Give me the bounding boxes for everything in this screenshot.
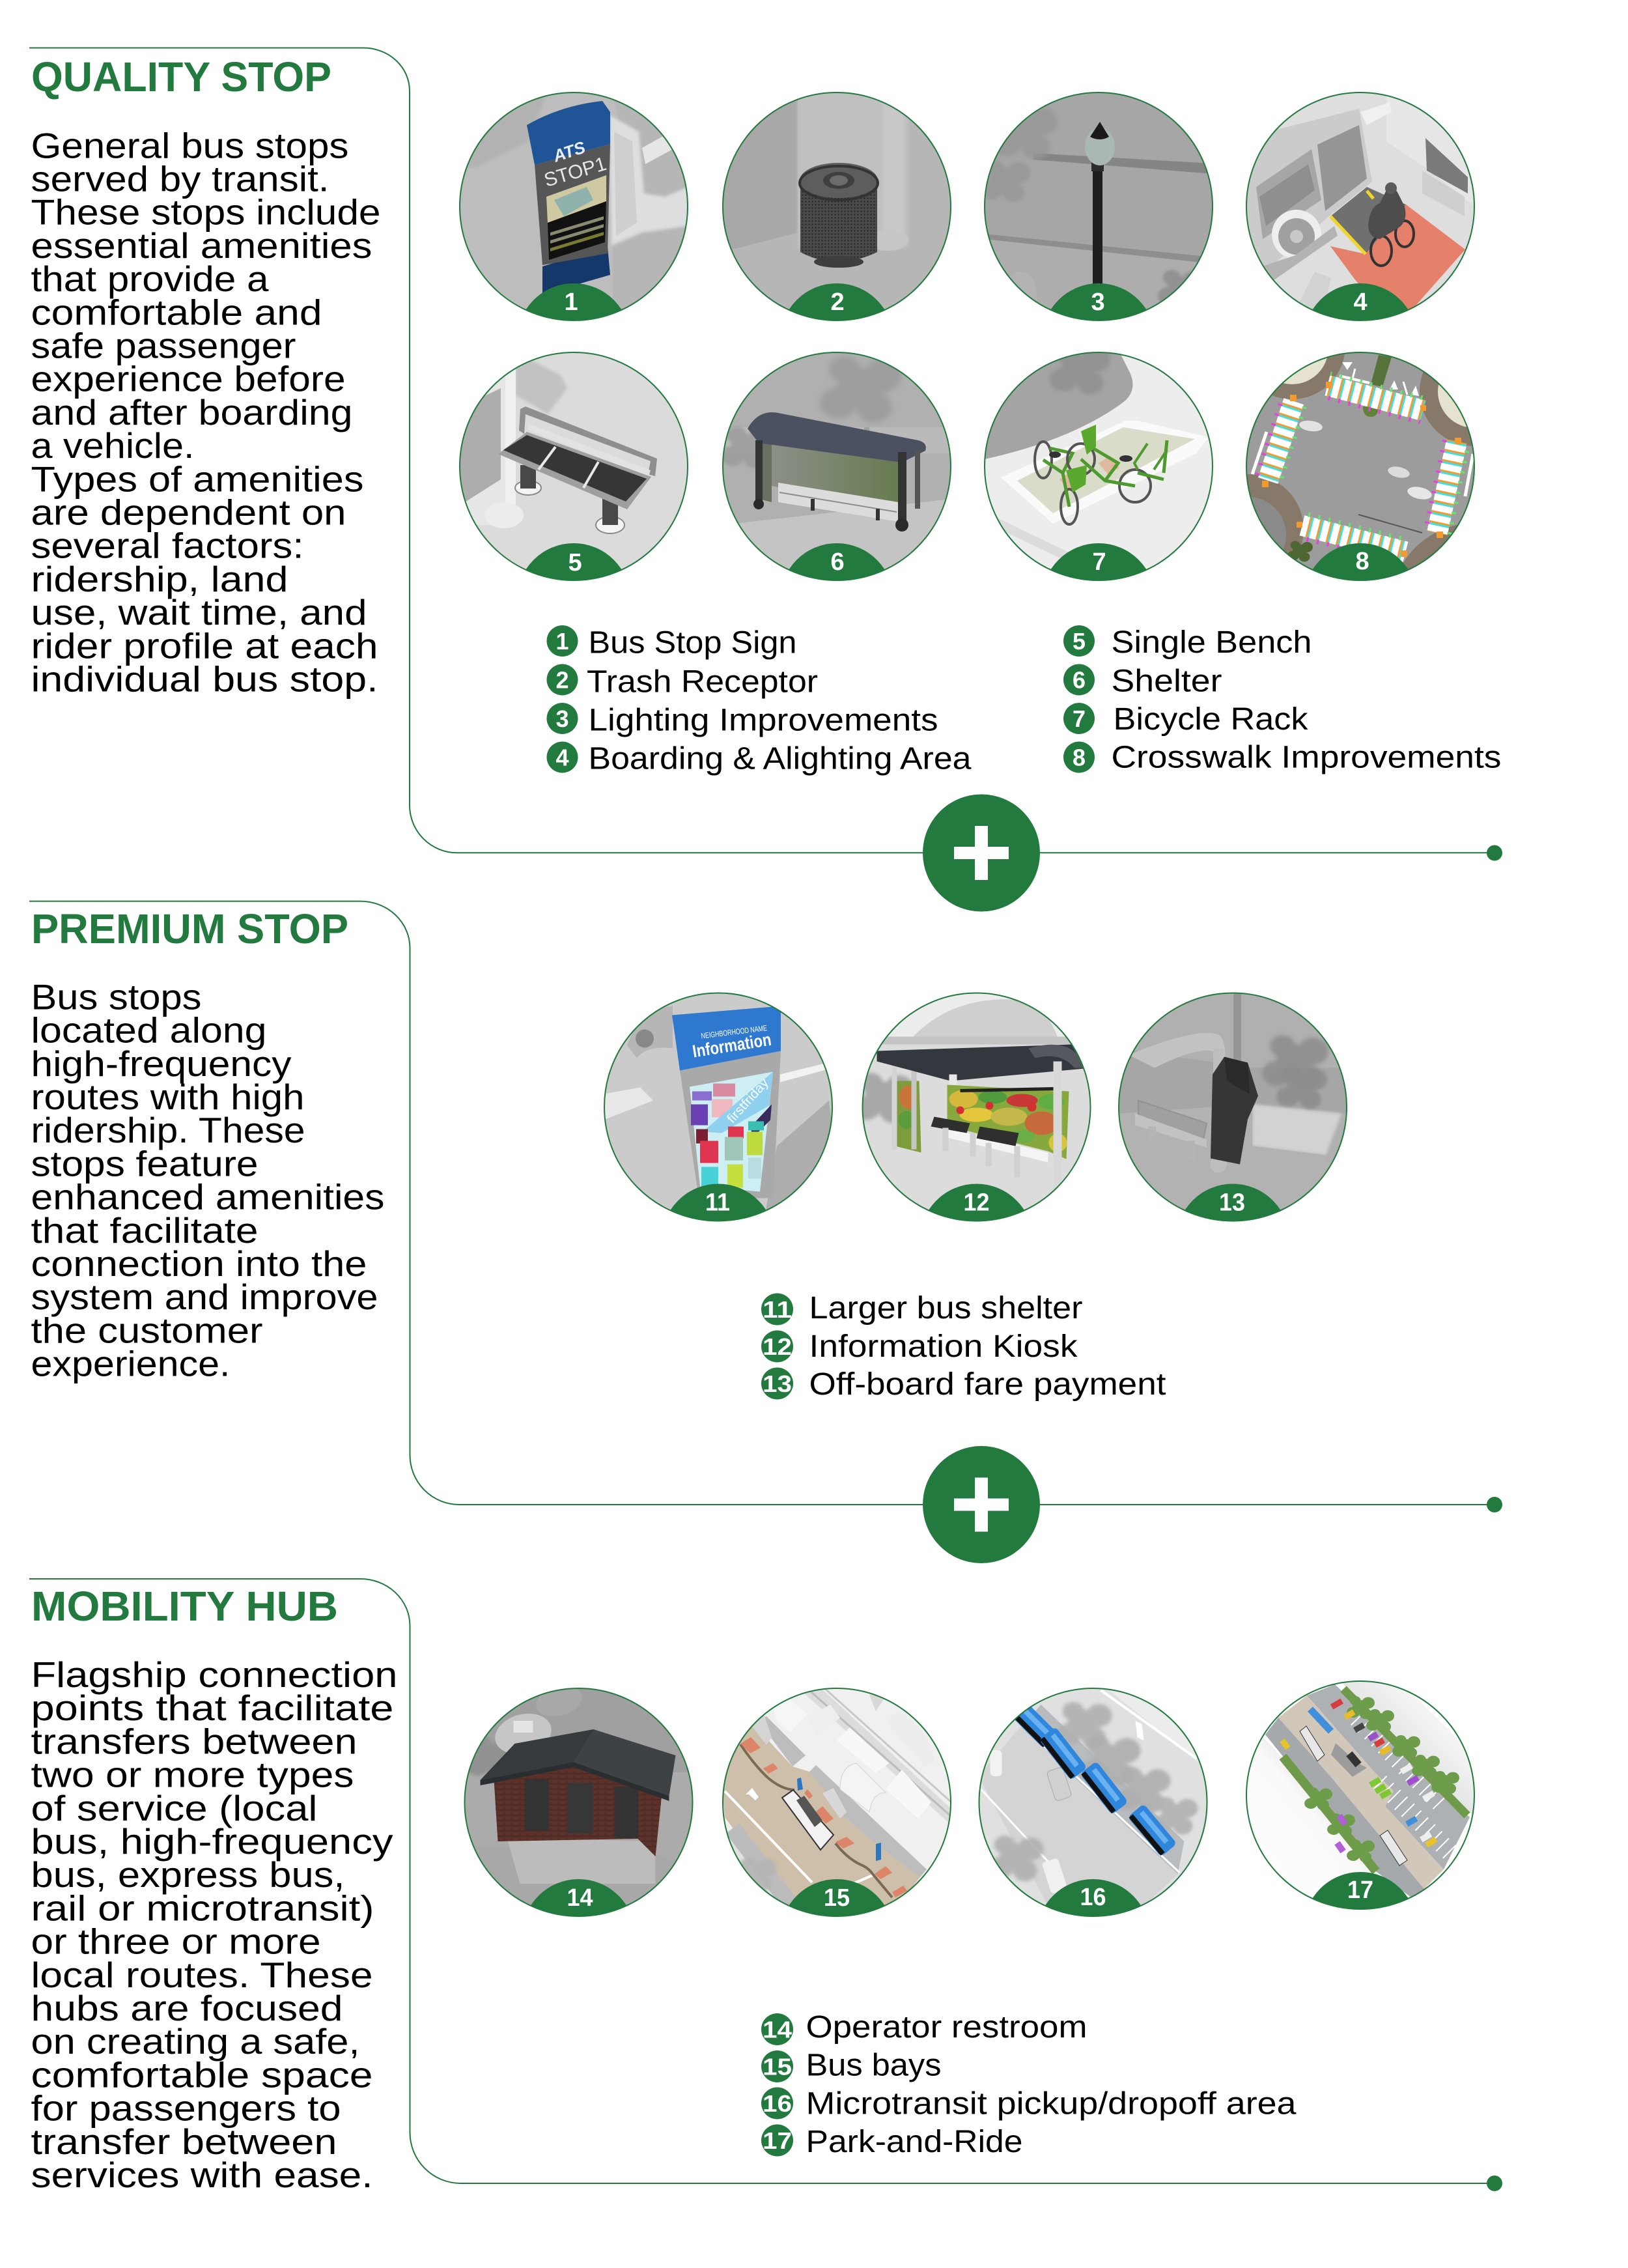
icon: 15 bus bays: 15 (824, 1884, 850, 1912)
text block: mobility hub description: transfer between (31, 2121, 337, 2162)
text block: mobility hub description: services with ease. (31, 2155, 372, 2195)
text block: quality stop description: Types of amenities (31, 459, 363, 499)
line end dot (1487, 1497, 1502, 1512)
panel: premium stop (29, 901, 1502, 1563)
icon: 11 information kiosk: NEIGHBORHOOD NAME (701, 1023, 768, 1040)
text block: quality stop description: served by transit. (31, 159, 330, 199)
legend: mobility hub amenities: 14 (763, 2017, 792, 2043)
legend: quality stop amenities: Boarding & Alighting Area (589, 742, 972, 776)
text block: premium stop description: routes with high (31, 1077, 305, 1117)
legend: quality stop amenities: Bicycle Rack (1114, 702, 1309, 737)
text block: premium stop description: that facilitate (31, 1210, 258, 1251)
text block: quality stop description: are dependent on (31, 492, 346, 533)
legend: premium stop amenities: 13 (763, 1370, 792, 1397)
legend: quality stop amenities: Single Bench (1111, 625, 1312, 660)
heading: quality stop: QUALITY STOP (31, 53, 331, 100)
legend: mobility hub amenities: Park-and-Ride (806, 2125, 1022, 2159)
text block: quality stop description: that provide a (31, 259, 269, 299)
legend: quality stop amenities: 1 (555, 628, 569, 655)
text block: quality stop description: rider profile at each (31, 625, 378, 666)
legend: quality stop amenities: 8 (1073, 744, 1086, 771)
icon: 15 bus bays (722, 1688, 951, 1917)
legend: mobility hub amenities: 16 (763, 2090, 792, 2117)
text block: mobility hub description: or three or more (31, 1921, 320, 1962)
text block: mobility hub description: for passengers to (31, 2088, 341, 2129)
icon: 1 bus stop sign (459, 92, 688, 321)
legend: mobility hub amenities: Microtransit pickup/dropoff area (806, 2087, 1297, 2121)
legend: mobility hub amenities: Operator restroom (806, 2010, 1088, 2045)
icon: 13 off-board fare payment: 13 (1219, 1189, 1245, 1217)
legend: premium stop amenities: Information Kiosk (809, 1329, 1078, 1364)
legend: quality stop amenities: Lighting Improvements (589, 703, 938, 738)
icon: plus connector (923, 1446, 1040, 1563)
icon: 7 bicycle rack (984, 352, 1213, 581)
text block: mobility hub description: bus, express bus, (31, 1854, 345, 1895)
icon: 11 information kiosk: 11 (705, 1189, 730, 1217)
text block: quality stop description: individual bus stop. (31, 659, 378, 700)
icon: 11 information kiosk: Information (691, 1030, 772, 1061)
text block: quality stop description: safe passenger (31, 326, 296, 366)
legend: quality stop amenities: Shelter (1111, 664, 1222, 698)
panel: quality stop (29, 48, 1558, 912)
text block: mobility hub description: comfortable space (31, 2054, 372, 2095)
text block: mobility hub description (31, 1654, 397, 2195)
icon: plus connector (923, 795, 1040, 912)
legend: quality stop amenities: Crosswalk Improvements (1111, 741, 1502, 775)
text block: mobility hub description: local routes. These (31, 1955, 372, 1995)
line end dot (1487, 2176, 1502, 2191)
icon: 16 microtransit pickup dropoff area (978, 1688, 1207, 1917)
legend: premium stop amenities: Off-board fare payment (809, 1367, 1166, 1402)
text block: premium stop description: connection into the (31, 1243, 367, 1284)
legend: premium stop amenities: 12 (763, 1333, 792, 1360)
legend: quality stop amenities: 5 (1073, 628, 1086, 655)
text block: premium stop description: stops feature (31, 1143, 258, 1184)
icon: 14 operator restroom (464, 1688, 693, 1917)
text block: premium stop description: located along (31, 1010, 267, 1051)
line end dot (1487, 845, 1502, 861)
text block: quality stop description: comfortable and (31, 292, 322, 332)
icon: 1 bus stop sign: STOP1 (542, 153, 609, 191)
icon: 8 crosswalk improvements (1246, 352, 1475, 581)
icon: 12 larger bus shelter: 12 (964, 1189, 990, 1217)
icon: 7 bicycle rack: 7 (1092, 548, 1106, 576)
text block: mobility hub description: rail or microtransit) (31, 1888, 374, 1928)
heading: premium stop: PREMIUM STOP (31, 905, 348, 952)
text block: quality stop description: use, wait time, and (31, 592, 367, 632)
icon: 3 lighting improvements: 3 (1091, 289, 1105, 316)
icon: 17 park-and-ride: 17 (1347, 1877, 1373, 1904)
legend: premium stop amenities: 11 (763, 1296, 792, 1323)
legend: premium stop amenities (761, 1291, 1166, 1402)
text block: premium stop description: enhanced amenities (31, 1177, 384, 1217)
panel outline: mobility hub bracket (29, 1579, 1495, 2183)
legend: premium stop amenities: Larger bus shelter (809, 1291, 1083, 1325)
legend: mobility hub amenities: 15 (763, 2053, 792, 2080)
text block: quality stop description: a vehicle. (31, 425, 194, 466)
icon: 4 boarding and alighting area: 4 (1353, 289, 1368, 316)
text block: mobility hub description: two or more types (31, 1755, 354, 1795)
legend: quality stop amenities: Trash Receptor (587, 664, 818, 699)
icon: 2 trash receptor: 2 (830, 289, 845, 316)
text block: quality stop description: These stops include (31, 192, 380, 233)
heading: mobility hub: MOBILITY HUB (31, 1583, 338, 1630)
icon: 4 boarding and alighting area (1246, 92, 1475, 321)
text block: quality stop description: General bus stops (31, 125, 349, 165)
icon: 1 bus stop sign: 1 (564, 289, 578, 316)
text block: premium stop description: experience. (31, 1344, 231, 1384)
legend: quality stop amenities: Bus Stop Sign (589, 626, 797, 660)
legend: quality stop amenities: 7 (1073, 705, 1086, 732)
text block: quality stop description: several factors: (31, 526, 303, 566)
text block: mobility hub description: of service (local (31, 1788, 318, 1828)
text block: premium stop description (31, 976, 384, 1384)
text block: quality stop description: essential amenities (31, 225, 372, 266)
icon: 16 microtransit pickup dropoff area: 16 (1080, 1884, 1106, 1911)
text block: mobility hub description: on creating a safe, (31, 2021, 359, 2062)
icon: 2 trash receptor (722, 92, 951, 321)
text block: premium stop description: the customer (31, 1310, 263, 1350)
panel outline: quality stop bracket (29, 48, 1495, 853)
panel: mobility hub (29, 1579, 1502, 2195)
icon: 6 shelter (722, 352, 951, 581)
text block: mobility hub description: hubs are focused (31, 1988, 343, 2028)
text block: premium stop description: system and improve (31, 1277, 378, 1317)
text block: premium stop description: ridership. These (31, 1110, 305, 1150)
icon: 5 single bench: 5 (568, 549, 582, 576)
icon: 5 single bench (459, 352, 688, 581)
text block: quality stop description: experience before (31, 359, 345, 399)
icon: 8 crosswalk improvements: 8 (1355, 548, 1369, 575)
legend: quality stop amenities: 6 (1073, 667, 1086, 693)
text block: mobility hub description: points that facilitate (31, 1688, 393, 1728)
panel outline: premium stop bracket (29, 901, 1495, 1505)
icon: 12 larger bus shelter (862, 993, 1091, 1222)
icon: 1 bus stop sign: ATS (550, 137, 588, 166)
icon: 3 lighting improvements (984, 92, 1213, 321)
text block: mobility hub description: transfers between (31, 1721, 357, 1761)
text block: quality stop description (31, 125, 380, 700)
text block: quality stop description: ridership, land (31, 559, 288, 599)
legend: mobility hub amenities: Bus bays (806, 2048, 942, 2083)
text block: mobility hub description: Flagship connection (31, 1654, 397, 1695)
legend: quality stop amenities: 3 (555, 705, 569, 732)
text block: premium stop description: high-frequency (31, 1043, 292, 1084)
icon: 11 information kiosk (604, 993, 833, 1222)
text block: premium stop description: Bus stops (31, 976, 202, 1017)
icon: 6 shelter: 6 (830, 548, 845, 576)
legend: quality stop amenities: 4 (555, 744, 569, 771)
legend: mobility hub amenities (761, 2010, 1297, 2159)
icon: 13 off-board fare payment (1118, 993, 1347, 1222)
legend: quality stop amenities: 2 (555, 667, 569, 693)
icon: 14 operator restroom: 14 (567, 1884, 593, 1912)
icon: 11 information kiosk: firstfriday (724, 1076, 772, 1126)
legend: mobility hub amenities: 17 (763, 2127, 792, 2154)
icon: 17 park-and-ride (1246, 1680, 1475, 1910)
text block: mobility hub description: bus, high-frequency (31, 1821, 393, 1862)
legend: quality stop amenities (547, 625, 1502, 776)
text block: quality stop description: and after boarding (31, 392, 353, 432)
